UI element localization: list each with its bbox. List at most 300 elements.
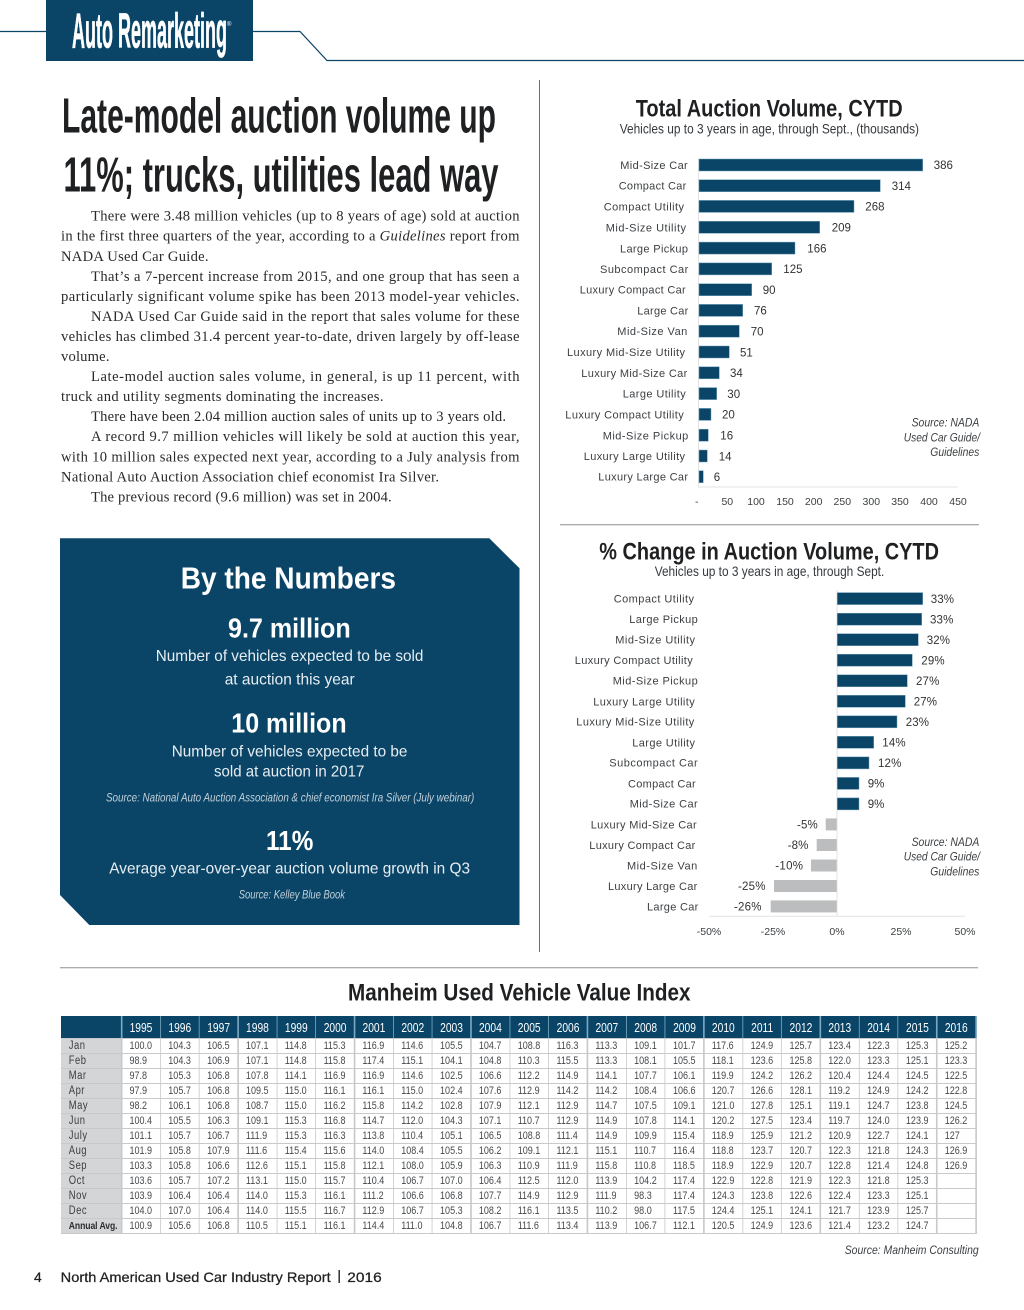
table body rows: 114.0 [362, 1145, 384, 1157]
table body rows: 101.1 [129, 1130, 152, 1142]
bar: Luxury Large Car [608, 880, 837, 893]
table body rows: 122.9 [711, 1175, 734, 1187]
table body rows: 115.7 [323, 1175, 345, 1187]
bar: Mid-Size Utility: Mid-Size Utility [615, 635, 696, 647]
table body rows: 121.7 [828, 1205, 850, 1217]
table body rows: 106.6 [401, 1190, 423, 1202]
bar: Large Pickup: Large Pickup [620, 243, 688, 255]
x axis: 150 [776, 496, 794, 508]
article body text: There have been 2.04 million auction sales of units up to 3 years old. [91, 409, 506, 425]
panel: By the Numbers [60, 538, 520, 925]
bar: Mid-Size Van [627, 860, 837, 873]
table body rows: 124.9 [750, 1040, 773, 1052]
table header row: 2012 [789, 1020, 812, 1034]
table body rows: Sep [68, 1160, 87, 1172]
table body rows: 116.9 [362, 1070, 384, 1082]
table header row: 2005 [517, 1020, 540, 1034]
table body rows: 106.6 [672, 1085, 695, 1097]
table body rows: 104.8 [440, 1220, 462, 1232]
bar: Large Car: 76 [754, 306, 767, 318]
bar: Mid-Size Van: Mid-Size Van [627, 860, 697, 872]
table body rows: 125.7 [905, 1205, 928, 1217]
table body rows: 122.0 [828, 1055, 850, 1067]
chart heading: Total Auction Volume [620, 96, 919, 136]
stat: 10 million [172, 708, 407, 781]
bar: Mid-Size Car: 386 [934, 160, 953, 172]
table body rows: 123.3 [867, 1055, 889, 1067]
table body rows: 126.9 [944, 1160, 967, 1172]
table body rows: 114.2 [401, 1100, 423, 1112]
table header row: 2014 [867, 1020, 890, 1034]
bar: Compact Car [619, 180, 911, 193]
table body rows: 124.4 [711, 1205, 734, 1217]
table body rows: 114.6 [401, 1070, 423, 1082]
table header row: 1998 [246, 1020, 268, 1034]
bar: Luxury Large Utility: 27% [914, 696, 937, 708]
table body rows: 124.1 [905, 1130, 928, 1142]
table body rows: 103.3 [129, 1160, 152, 1172]
bar: Large Car [647, 900, 837, 914]
footer: North American Used Car Industry Report [61, 1269, 331, 1285]
table body rows: 122.7 [867, 1130, 889, 1142]
article body text: That’s a 7-percent increase from 2015, and one group that has seen a [91, 269, 520, 285]
table body rows: 108.0 [401, 1160, 423, 1172]
table body rows: 105.5 [672, 1055, 695, 1067]
bar: Compact Car: 314 [892, 181, 911, 193]
bar: Compact Car: Compact Car [628, 778, 696, 790]
table body rows: 114.2 [595, 1085, 617, 1097]
table body rows: 123.7 [750, 1145, 773, 1157]
table body rows: 105.5 [440, 1145, 462, 1157]
table body rows: 116.8 [323, 1115, 345, 1127]
table body rows: Jun [68, 1115, 85, 1127]
table body rows: 114.9 [595, 1115, 617, 1127]
x axis [695, 496, 967, 508]
table body rows: 109.9 [634, 1130, 656, 1142]
table body rows: 107.6 [478, 1085, 501, 1097]
table body rows: 107.0 [168, 1205, 190, 1217]
bar: Luxury Compact Utility: Luxury Compact Utility [575, 655, 693, 667]
table body rows: 106.7 [478, 1220, 501, 1232]
table body rows: 120.5 [711, 1220, 734, 1232]
table body rows: 101.7 [672, 1040, 695, 1052]
table body rows: 110.4 [362, 1175, 384, 1187]
table body rows: 122.6 [789, 1190, 812, 1202]
table body rows: 121.0 [711, 1100, 734, 1112]
table body rows: 102.5 [440, 1070, 462, 1082]
bar: Compact Car [628, 777, 884, 791]
table body rows: 126.9 [944, 1145, 967, 1157]
bar: Luxury Large Car: 6 [714, 472, 720, 484]
table body rows: Dec [68, 1205, 87, 1217]
table body rows: 106.8 [207, 1220, 229, 1232]
bar: Large Utility [623, 388, 740, 401]
table body rows: 106.1 [168, 1100, 190, 1112]
chart heading: % Change [599, 538, 939, 579]
table body rows: 125.2 [944, 1040, 967, 1052]
table body rows: 112.9 [362, 1205, 384, 1217]
table body rows: 108.4 [634, 1085, 656, 1097]
stat: 9.7 million: 9.7 million [228, 612, 351, 643]
bar: Subcompact Car: Subcompact Car [609, 758, 698, 770]
stat: 10 million: Number of vehicles expected to be [172, 744, 407, 761]
bar: Luxury Compact Car: Luxury Compact Car [589, 840, 696, 852]
bar: Large Pickup: 33% [930, 614, 953, 626]
table body rows: 105.7 [168, 1130, 190, 1142]
table body rows: 122.3 [867, 1040, 889, 1052]
table body rows: 105.7 [168, 1085, 190, 1097]
table body rows: 122.8 [944, 1085, 967, 1097]
table body rows: 114.1 [672, 1115, 694, 1127]
table body rows: 123.8 [905, 1100, 928, 1112]
table body rows: 115.6 [323, 1145, 345, 1157]
table body rows: 125.7 [789, 1040, 812, 1052]
table body rows: Aug [68, 1145, 87, 1157]
bar: Luxury Large Car: Luxury Large Car [608, 881, 698, 893]
article body text: NADA Used Car Guide said in the report that sales volume for these [91, 309, 520, 325]
table body rows: 109.1 [517, 1145, 540, 1157]
bar: Large Car: Large Car [637, 305, 689, 317]
x axis: - [695, 496, 699, 508]
article body text [61, 209, 520, 505]
bar: Luxury Mid-Size Utility [576, 716, 929, 729]
table body rows: 112.1 [556, 1145, 578, 1157]
table body rows: 116.2 [323, 1100, 345, 1112]
bar chart: % Change in Auction Volume [575, 590, 976, 938]
table body rows: 124.5 [944, 1100, 967, 1112]
table body rows: 124.0 [867, 1115, 889, 1127]
x axis: 250 [834, 496, 851, 508]
bar: Subcompact Car: 125 [783, 264, 802, 276]
table body rows: 122.3 [828, 1145, 850, 1157]
table body rows: 106.8 [440, 1190, 462, 1202]
headline: 11%; trucks, utilities lead way [64, 149, 498, 203]
table header row: 2002 [401, 1020, 424, 1034]
table body rows: 115.8 [595, 1160, 617, 1172]
table body rows: 119.7 [828, 1115, 850, 1127]
table header row: 2013 [828, 1020, 851, 1034]
article body text: The previous record (9.6 million) was set in 2004. [91, 489, 392, 505]
table body rows: 98.3 [634, 1190, 651, 1202]
table body rows: 114.7 [362, 1115, 384, 1127]
table body rows: 124.5 [905, 1070, 928, 1082]
bar: Mid-Size Van [617, 325, 763, 338]
source note: NADA (volume chart): Used Car Guide/ [904, 430, 981, 444]
table body rows: 106.8 [207, 1070, 229, 1082]
table body rows: Annual Avg. [68, 1220, 117, 1232]
table body rows: 107.7 [634, 1070, 656, 1082]
table header row: 2004 [478, 1020, 501, 1034]
table body rows: 106.4 [207, 1190, 229, 1202]
bar: Large Car [637, 304, 767, 318]
bar: Luxury Large Car [598, 471, 720, 484]
table body rows: 114.4 [362, 1220, 384, 1232]
table body rows: 109.1 [634, 1040, 656, 1052]
table body rows: 105.5 [168, 1115, 190, 1127]
stat: 11% [109, 825, 470, 877]
table body rows: 122.8 [750, 1175, 773, 1187]
table body rows: 124.2 [905, 1085, 928, 1097]
bar: Mid-Size Car: Mid-Size Car [620, 160, 688, 172]
panel heading: By the Numbers [181, 560, 396, 595]
table body rows: 113.5 [556, 1205, 578, 1217]
table body rows: 114.9 [556, 1070, 578, 1082]
bar: Mid-Size Pickup: 27% [916, 676, 939, 688]
table body rows: 97.8 [129, 1070, 147, 1082]
table body rows: 108.2 [478, 1205, 501, 1217]
table body rows: 112.9 [556, 1190, 578, 1202]
x axis: 400 [920, 496, 938, 508]
article body text: There were 3.48 million vehicles (up to 8 years of age) sold at auction [91, 209, 520, 225]
bar: Luxury Mid-Size Car [591, 818, 837, 832]
table body rows: 118.1 [711, 1055, 733, 1067]
table body rows: 117.6 [711, 1040, 733, 1052]
table body rows: 112.9 [517, 1085, 539, 1097]
bar: Mid-Size Utility: 32% [927, 635, 950, 647]
headline: Late-model auction volume up [62, 90, 496, 144]
table body rows: 115.1 [595, 1145, 617, 1157]
bar: Luxury Compact Utility [575, 654, 945, 667]
table body rows: 103.6 [129, 1175, 152, 1187]
bar: Luxury Compact Utility [565, 408, 735, 422]
bar: Subcompact Car [600, 263, 802, 276]
table header row: 2003 [440, 1020, 462, 1034]
bar: Mid-Size Pickup [613, 675, 939, 688]
x axis: 100 [747, 496, 765, 508]
table body rows: 115.0 [284, 1100, 306, 1112]
table body rows: 107.1 [478, 1115, 501, 1127]
text: Auto Remarketing [72, 4, 227, 58]
table body rows: 114.0 [245, 1190, 267, 1202]
x axis: -50% [697, 926, 721, 938]
table body rows: 106.6 [478, 1070, 501, 1082]
table body rows: 128.1 [789, 1085, 812, 1097]
table body rows: 119.9 [711, 1070, 733, 1082]
table header row: 1997 [207, 1020, 230, 1034]
table body rows: 127.5 [750, 1115, 773, 1127]
table body rows: 115.5 [284, 1205, 306, 1217]
table body rows: 122.4 [828, 1190, 850, 1202]
table body rows: 112.0 [401, 1115, 423, 1127]
x axis [697, 926, 976, 938]
table body rows: 116.1 [517, 1205, 539, 1217]
table body rows: 122.8 [828, 1160, 850, 1172]
table body rows: 112.0 [556, 1175, 578, 1187]
article body text: vehicles has climbed 31.4 percent year-to-date, driven largely by off-lease [61, 329, 520, 345]
table body rows: 100.4 [129, 1115, 152, 1127]
table body rows: 110.7 [634, 1145, 656, 1157]
table body rows: 117.4 [672, 1175, 694, 1187]
table header row: 1999 [284, 1020, 307, 1034]
chart heading: Total Auction Volume: Total Auction Volume, CYTD [636, 96, 903, 123]
table body rows: 106.4 [207, 1205, 229, 1217]
table body rows: 114.8 [284, 1055, 306, 1067]
table body rows: 111.2 [362, 1190, 383, 1202]
table body rows: 105.1 [440, 1130, 462, 1142]
chart heading: Total Auction Volume: Vehicles up to 3 years in age, through Sept., (thousands) [620, 120, 919, 136]
table body rows: 105.3 [440, 1205, 462, 1217]
source note: Manheim: Source: Manheim Consulting [845, 1243, 979, 1257]
table body rows: 108.4 [401, 1145, 423, 1157]
table body rows: 115.4 [672, 1130, 694, 1142]
x axis: 350 [891, 496, 909, 508]
table body rows: 114.0 [245, 1205, 267, 1217]
table body rows: 114.1 [595, 1070, 617, 1082]
table body rows: 98.2 [129, 1100, 147, 1112]
table body rows: 124.7 [867, 1100, 889, 1112]
table body rows: 110.8 [634, 1160, 656, 1172]
table body rows: 124.8 [905, 1160, 928, 1172]
stat: 11%: Average year-over-year auction volume growth in Q3 [109, 860, 470, 877]
bar: Compact Utility: Compact Utility [614, 593, 694, 605]
table body rows: 106.8 [207, 1085, 229, 1097]
table body rows: 117.4 [362, 1055, 384, 1067]
table body rows: 115.5 [556, 1055, 578, 1067]
table body rows: 104.3 [440, 1115, 462, 1127]
table body rows: 109.5 [245, 1085, 268, 1097]
bar: Luxury Mid-Size Utility [567, 346, 753, 359]
article body text: volume. [61, 349, 110, 365]
table body rows: 118.5 [672, 1160, 694, 1172]
table body rows: 116.3 [323, 1130, 345, 1142]
table body rows: 107.8 [245, 1070, 268, 1082]
table body rows: 112.1 [362, 1160, 384, 1172]
table body rows: 105.6 [168, 1220, 190, 1232]
logo: Auto Remarketing: ® [227, 21, 232, 28]
article body text: A record 9.7 million vehicles will likely be sold at auction this year, [91, 429, 520, 445]
stat: 9.7 million [156, 612, 423, 688]
table body rows: 115.3 [284, 1115, 306, 1127]
bar: Luxury Mid-Size Car [581, 367, 743, 380]
chart heading: % Change: Vehicles up to 3 years in age, through Sept. [655, 563, 884, 579]
bar: Compact Utility: 268 [865, 202, 884, 214]
table body rows: 105.8 [168, 1160, 190, 1172]
table body rows: 124.4 [867, 1070, 889, 1082]
table body rows: 122.3 [828, 1175, 850, 1187]
bar: Large Utility: 30 [727, 389, 740, 401]
table body rows: 113.9 [595, 1220, 617, 1232]
table body rows: 105.9 [440, 1160, 462, 1172]
table body rows: 104.1 [440, 1055, 462, 1067]
table body rows: Mar [68, 1070, 86, 1082]
bar: Luxury Large Car: -25% [738, 881, 766, 893]
table body rows: 100.0 [129, 1040, 152, 1052]
bar: Mid-Size Van: 70 [751, 326, 763, 338]
table body rows: 122.9 [750, 1160, 773, 1172]
table body rows: 117.4 [672, 1190, 694, 1202]
table body rows: 120.7 [711, 1085, 734, 1097]
table body rows: 122.5 [944, 1070, 967, 1082]
bar: Luxury Compact Utility: 29% [921, 655, 945, 667]
table body rows: 120.2 [711, 1115, 734, 1127]
table body rows: July [68, 1130, 87, 1142]
bar: Luxury Large Utility [584, 450, 732, 463]
table body rows: 107.1 [245, 1055, 268, 1067]
bar: Large Pickup: 166 [807, 243, 826, 255]
bar: Luxury Large Utility: Luxury Large Utility [584, 451, 686, 463]
table body rows: 123.8 [750, 1190, 773, 1202]
table body rows: 106.3 [478, 1160, 501, 1172]
bar: Subcompact Car [609, 757, 901, 770]
table body rows: 113.3 [595, 1040, 617, 1052]
table body rows: 106.9 [207, 1055, 229, 1067]
x axis: 50 [721, 496, 733, 508]
table body rows: 115.0 [401, 1085, 423, 1097]
table body rows: 125.1 [905, 1190, 928, 1202]
bar: Mid-Size Utility [606, 221, 851, 234]
table body rows: 110.9 [517, 1160, 539, 1172]
table header row: 2011 [751, 1020, 773, 1034]
table body rows: 115.3 [284, 1130, 306, 1142]
bar: Luxury Mid-Size Car: Luxury Mid-Size Car [591, 819, 697, 831]
table body rows: 106.3 [207, 1115, 229, 1127]
x axis: 300 [863, 496, 880, 508]
table body rows: 125.3 [905, 1175, 928, 1187]
table body rows: 117.5 [672, 1205, 694, 1217]
table body rows: 125.9 [750, 1130, 773, 1142]
table body rows: 123.9 [867, 1205, 889, 1217]
bar: Mid-Size Utility: Mid-Size Utility [606, 222, 686, 234]
table body rows: 121.4 [828, 1220, 850, 1232]
table body rows: 124.7 [905, 1220, 928, 1232]
table body rows: 123.2 [867, 1220, 889, 1232]
x axis: 200 [805, 496, 823, 508]
bar: Large Utility [632, 736, 906, 750]
x axis: 0% [829, 926, 845, 938]
footer: 2016 [347, 1269, 382, 1285]
table body rows: 125.8 [789, 1055, 812, 1067]
table body rows: 107.0 [440, 1175, 462, 1187]
bar: Luxury Mid-Size Utility: 23% [906, 717, 929, 729]
table body rows: 98.9 [129, 1055, 147, 1067]
bar: Mid-Size Car: 9% [868, 799, 884, 811]
table header row: 2007 [595, 1020, 618, 1034]
table body rows: 119.1 [828, 1100, 850, 1112]
table body rows: 105.7 [168, 1175, 190, 1187]
bar: Luxury Compact Car [589, 839, 837, 852]
article body text: particularly significant volume spike has been 2013 model-year vehicles. [61, 289, 520, 305]
table body rows: 102.8 [440, 1100, 462, 1112]
headline [62, 90, 498, 203]
bar: Large Car: Large Car [647, 901, 699, 913]
bar: Large Car: -26% [734, 902, 762, 914]
bar: Mid-Size Van: -10% [775, 861, 803, 873]
source note: NADA (change chart): Used Car Guide/ [904, 850, 981, 864]
bar: Compact Utility: 33% [931, 594, 954, 606]
table body rows: 106.6 [207, 1160, 229, 1172]
bar: Mid-Size Car [630, 798, 884, 811]
table body rows: 125.1 [905, 1055, 928, 1067]
table body rows: 116.9 [362, 1040, 384, 1052]
article body text: Late-model auction sales volume, in general, is up 11 percent, with [91, 369, 520, 385]
table body rows: 116.3 [556, 1040, 578, 1052]
table header row [60, 1016, 976, 1038]
table body rows: 126.6 [750, 1085, 773, 1097]
table body rows: 110.7 [517, 1115, 539, 1127]
table body rows: 105.5 [440, 1040, 462, 1052]
bar: Large Utility: Large Utility [632, 737, 696, 749]
table body rows: Feb [68, 1055, 86, 1067]
stat: 10 million: sold at auction in 2017 [214, 764, 364, 781]
table body rows: 106.4 [478, 1175, 501, 1187]
table body rows: 111.6 [517, 1220, 538, 1232]
bar: Luxury Compact Utility: 20 [722, 410, 735, 422]
bar: Subcompact Car: Subcompact Car [600, 264, 689, 276]
table body rows: 121.9 [789, 1175, 812, 1187]
table body rows: 113.4 [556, 1220, 578, 1232]
table body rows: 123.3 [944, 1055, 967, 1067]
table body rows: 104.3 [168, 1040, 190, 1052]
